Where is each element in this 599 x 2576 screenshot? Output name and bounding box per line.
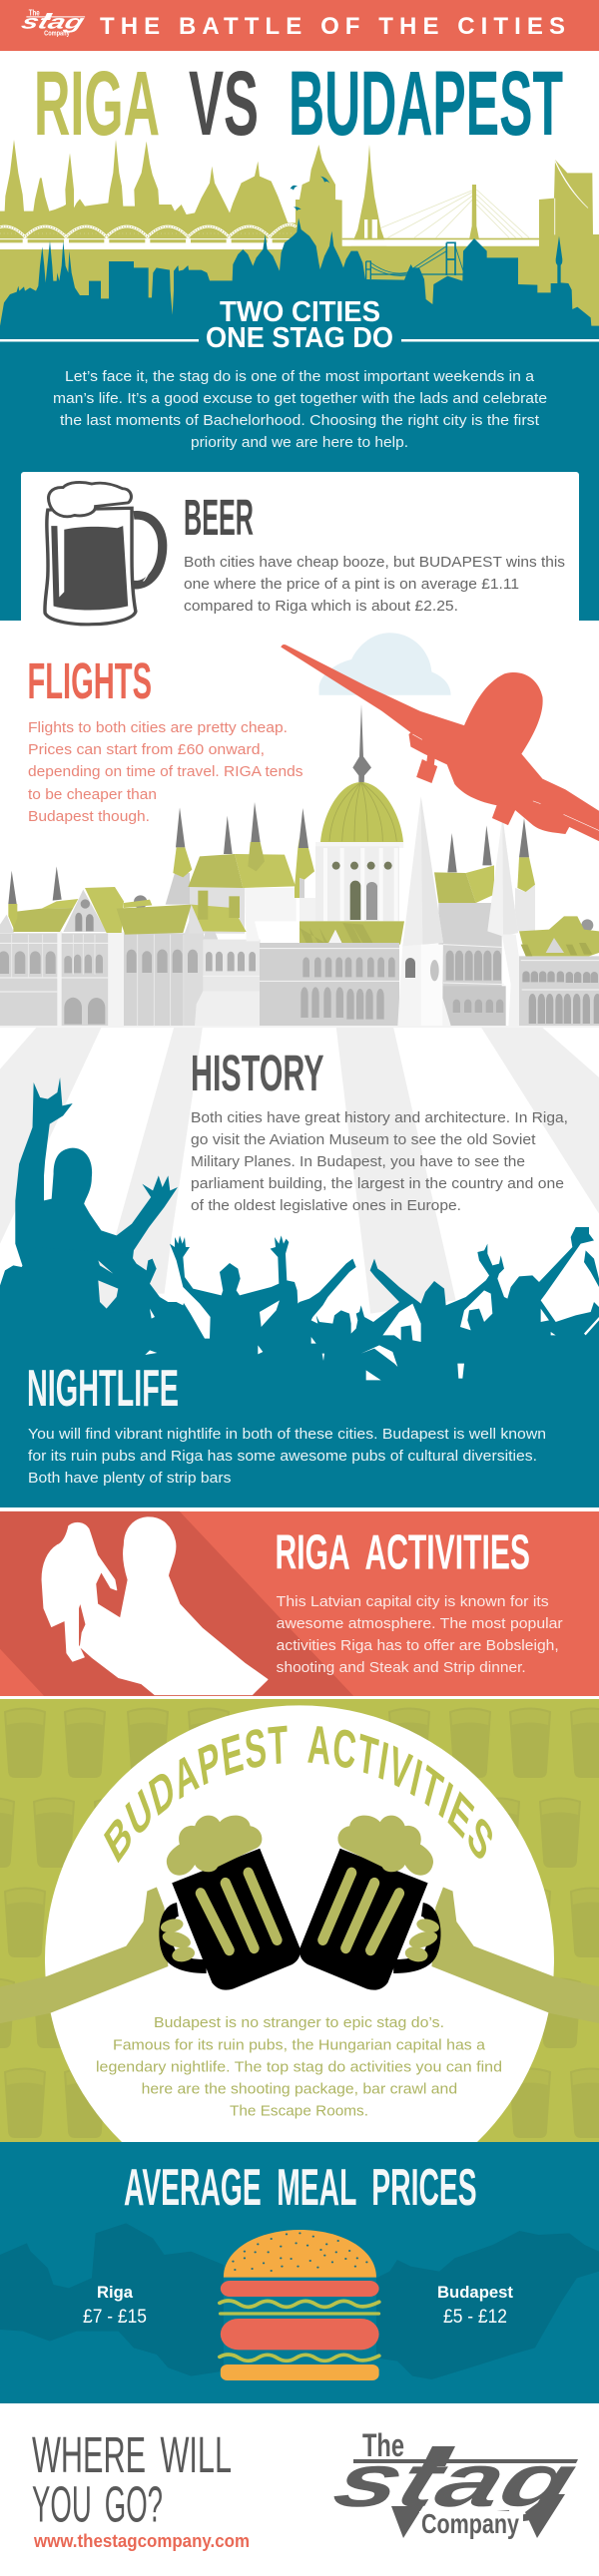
suspension bridge bbox=[366, 242, 463, 279]
icon: cloud bbox=[319, 633, 451, 695]
left arm and mug bbox=[0, 1816, 300, 2023]
map shapes bbox=[0, 2223, 599, 2379]
central dome bbox=[299, 704, 404, 945]
left roofs and spires bbox=[8, 802, 300, 935]
riga activities text: awesome atmosphere. The most popular bbox=[277, 1615, 563, 1632]
nightlife text: Both have plenty of strip bars bbox=[28, 1470, 232, 1487]
stag company logo bbox=[324, 2427, 587, 2539]
intro text: Let’s face it, the stag do is one of the most important weekends in a bbox=[65, 368, 535, 385]
nightlife heading: NIGHTLIFE bbox=[27, 1360, 179, 1418]
flights text bbox=[28, 719, 303, 825]
header title: THE BATTLE OF THE CITIES bbox=[100, 13, 565, 40]
light rays bbox=[0, 1028, 599, 1314]
panel: history and nightlife bbox=[0, 1028, 599, 1507]
icon: plane bbox=[281, 644, 599, 841]
panel: beer: BEER bbox=[184, 489, 254, 546]
panel: beer bbox=[21, 472, 579, 632]
main title bbox=[34, 53, 563, 155]
beer text bbox=[184, 554, 565, 615]
centre wing bbox=[260, 943, 399, 1026]
nightlife text: for its ruin pubs and Riga has some awesome pubs of cultural diversities. bbox=[28, 1448, 537, 1465]
website: www.thestagcompany.com bbox=[33, 2531, 250, 2551]
history text: Military Planes. In Budapest, you have to see the bbox=[191, 1153, 525, 1170]
budapest price: Budapest bbox=[437, 2283, 513, 2302]
olive skyline Riga bbox=[0, 140, 599, 339]
panel: riga activities bbox=[0, 1511, 599, 1696]
icon: beer mug bbox=[45, 482, 163, 625]
beer text: Both cities have cheap booze, but BUDAPEST wins this bbox=[184, 554, 565, 571]
flights text: depending on time of travel. RIGA tends bbox=[28, 763, 303, 780]
flights text: to be cheaper than bbox=[28, 786, 157, 803]
intro text: the last moments of Bachelorhood. Choosing the right city is the first bbox=[60, 412, 540, 429]
intro text: man’s life. It’s a good excuse to get together with the lads and celebrate bbox=[53, 390, 547, 407]
crowd bbox=[0, 1227, 599, 1417]
riga activities text: activities Riga has to offer are Bobsleigh, bbox=[277, 1637, 559, 1654]
history text: parliament building, the largest in the country and one bbox=[191, 1175, 564, 1192]
panel: average meal prices bbox=[0, 2142, 599, 2403]
subheading: ONE STAG DO bbox=[206, 322, 393, 354]
riga price: £7 - £15 bbox=[83, 2307, 147, 2328]
flights text: Budapest though. bbox=[28, 808, 150, 825]
closing question bbox=[32, 2426, 232, 2532]
history text: Both cities have great history and architecture. In Riga, bbox=[191, 1109, 568, 1126]
pint glass pattern bbox=[0, 1708, 599, 2137]
flights text: Flights to both cities are pretty cheap. bbox=[28, 719, 288, 736]
arched heading: BUDAPEST ACTIVITIES bbox=[104, 1726, 492, 1864]
stag company logo: The bbox=[362, 2427, 404, 2463]
beer text: one where the price of a pint is on average £1.11 bbox=[184, 576, 519, 593]
left wing facade bbox=[0, 887, 302, 1026]
budapest price: £5 - £12 bbox=[443, 2307, 507, 2328]
stag company logo: Company bbox=[421, 2508, 519, 2539]
teal skyline Budapest bbox=[0, 217, 599, 339]
crowd silhouette bbox=[0, 1077, 599, 1417]
panel: budapest activities bbox=[0, 1699, 599, 2142]
gaps in crowd bbox=[145, 1290, 599, 1380]
intro text: priority and we are here to help. bbox=[191, 434, 408, 451]
diagonal shadow bbox=[0, 1511, 353, 1696]
clinking mugs and arms bbox=[0, 1816, 599, 2023]
bridge arches bbox=[0, 224, 297, 239]
budapest activities text bbox=[96, 2014, 502, 2120]
closing question: WHERE WILL bbox=[32, 2426, 232, 2483]
parliament building bbox=[0, 704, 599, 1028]
couple silhouette bbox=[42, 1517, 268, 1694]
right arm and mug bbox=[300, 1816, 599, 2023]
budapest price bbox=[437, 2283, 513, 2328]
budapest activities text: legendary nightlife. The top stag do activities you can find bbox=[96, 2059, 502, 2075]
main title: VS bbox=[189, 53, 259, 155]
riga activities text: This Latvian capital city is known for its bbox=[277, 1593, 549, 1610]
header logo: stag bbox=[19, 12, 87, 34]
flights heading: FLIGHTS bbox=[28, 652, 152, 709]
riga activities text: shooting and Steak and Strip dinner. bbox=[277, 1659, 526, 1676]
birds bbox=[291, 177, 330, 211]
nightlife text bbox=[28, 1426, 546, 1487]
white circle bbox=[45, 1705, 554, 2142]
man with raised arm bbox=[15, 1077, 178, 1327]
budapest activities text: The Escape Rooms. bbox=[230, 2103, 368, 2120]
beer text: compared to Riga which is about £2.25. bbox=[184, 598, 458, 615]
rule lines bbox=[0, 339, 599, 341]
history text: go visit the Aviation Museum to see the old Soviet bbox=[191, 1131, 536, 1148]
closing question: YOU GO? bbox=[32, 2476, 163, 2532]
small spire pod bbox=[556, 256, 562, 265]
nightlife text: You will find vibrant nightlife in both of these cities. Budapest is well known bbox=[28, 1426, 546, 1443]
header banner bbox=[0, 0, 599, 51]
budapest activities text: Budapest is no stranger to epic stag do’s. bbox=[154, 2014, 444, 2031]
stag company logo: stag bbox=[324, 2439, 587, 2523]
cable stayed bridge bbox=[381, 190, 529, 237]
main title: RIGA bbox=[34, 53, 160, 155]
budapest activities text: here are the shooting package, bar crawl and bbox=[142, 2081, 457, 2098]
flights text: Prices can start from £60 onward, bbox=[28, 741, 265, 758]
subheading bbox=[206, 296, 393, 354]
header logo: Company bbox=[44, 29, 70, 38]
icon: burger bbox=[219, 2230, 380, 2380]
right wing bbox=[434, 816, 599, 1026]
history text bbox=[191, 1109, 568, 1214]
budapest activities text: Famous for its ruin pubs, the Hungarian capital has a bbox=[113, 2037, 486, 2053]
history text: of the oldest legislative ones in Europe. bbox=[191, 1197, 461, 1214]
city skyline bbox=[0, 140, 599, 339]
intro text bbox=[53, 368, 547, 451]
windows left bbox=[0, 949, 299, 1025]
header logo: The bbox=[29, 8, 40, 18]
riga price: Riga bbox=[97, 2283, 134, 2302]
riga price bbox=[83, 2283, 147, 2328]
centre tower bbox=[397, 796, 451, 1026]
intro panel bbox=[0, 296, 599, 621]
history heading: HISTORY bbox=[191, 1045, 323, 1101]
riga activities text bbox=[277, 1593, 563, 1676]
subheading: TWO CITIES bbox=[220, 296, 380, 328]
nightlife panel bbox=[0, 1360, 599, 1507]
header logo bbox=[19, 8, 87, 38]
